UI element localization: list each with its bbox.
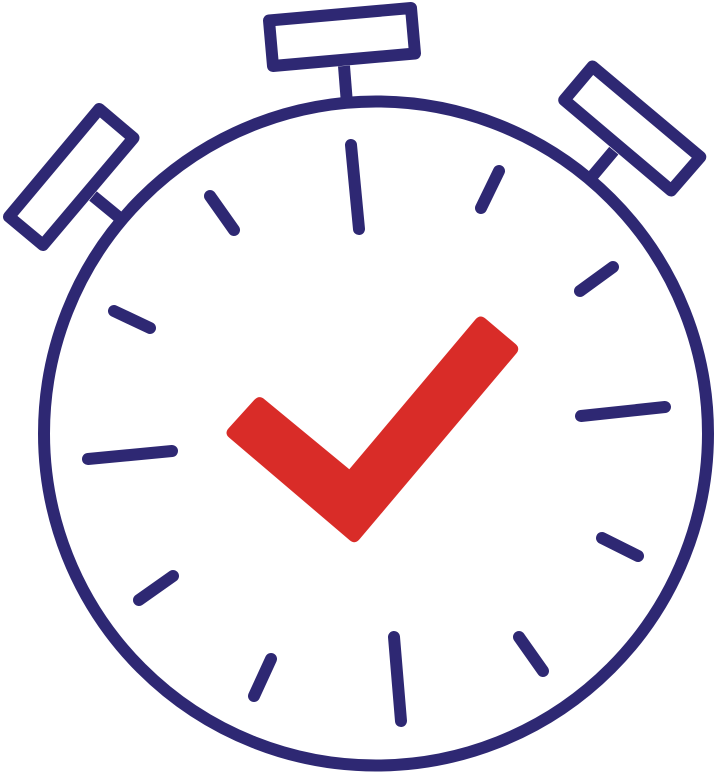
stopwatch body circle <box>44 102 708 766</box>
left button <box>9 109 134 245</box>
check mark <box>226 316 518 542</box>
right button <box>564 66 700 190</box>
clock tick marks <box>88 145 665 721</box>
top button <box>269 8 415 100</box>
